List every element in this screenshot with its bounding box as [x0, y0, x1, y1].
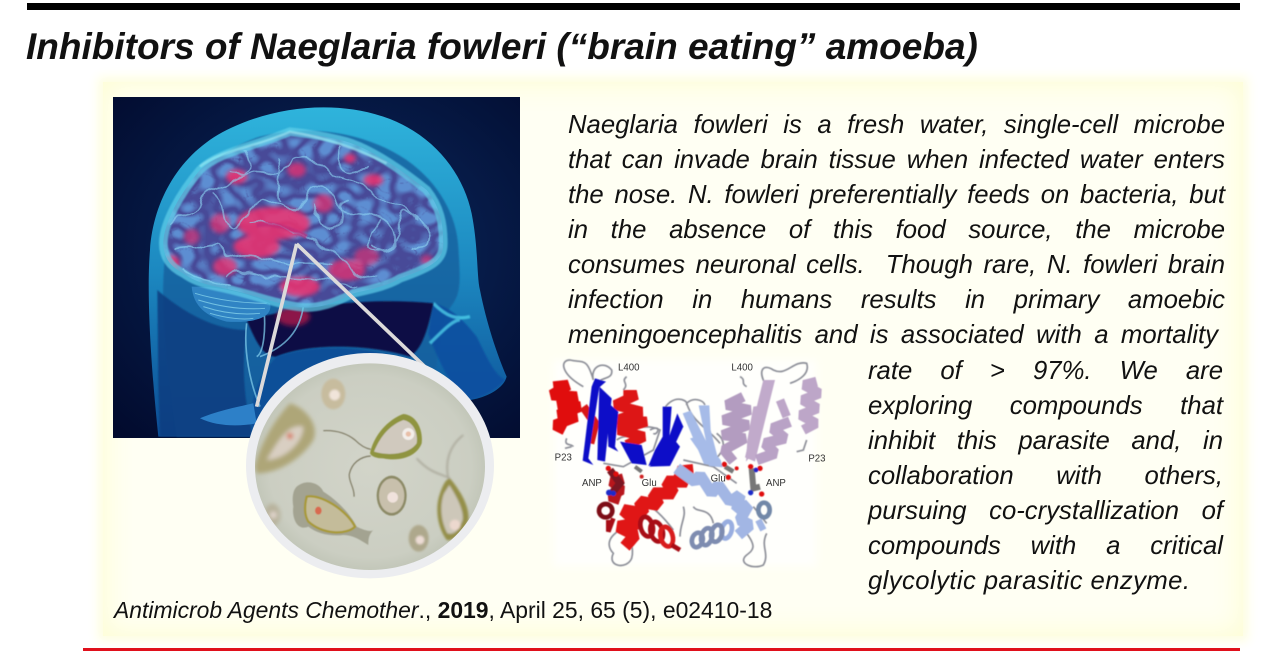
amoeba: central flagellated: [323, 414, 422, 497]
cerebellum: [192, 287, 270, 322]
amoeba: right blurred: [417, 435, 469, 540]
gyri texture: [164, 136, 443, 308]
text block: description lower: glycolytic parasitic enzyme.: [868, 567, 1190, 595]
text block: description lower: compounds with a critical: [868, 532, 1223, 560]
amoeba: bottom small: [409, 525, 429, 552]
protein labels: L400: [618, 362, 639, 373]
text block: description upper: [568, 111, 1226, 349]
icon: magnified amoeba circle: [246, 353, 494, 578]
head silhouette: [149, 107, 507, 437]
protein labels: P23: [808, 454, 826, 465]
protein labels: P23: [555, 452, 572, 463]
bottom red rule: [83, 648, 1240, 651]
text block: description upper: in the absence of this food source, the microbe: [568, 216, 1225, 244]
text block: description upper: meningoencephalitis and is associated with a mortality: [568, 321, 1218, 349]
brain hot spots: [164, 154, 433, 297]
text block: description lower: [867, 357, 1226, 595]
panel: pale yellow background: [103, 82, 1243, 636]
left alpha helices red: [552, 385, 580, 430]
protein labels: Glu: [711, 474, 726, 485]
protein labels: Glu: [642, 478, 657, 489]
text block: description lower: collaboration with others,: [868, 462, 1223, 490]
zoom callout lines: [257, 244, 430, 407]
text block: description upper: the nose. N. fowleri preferentially feeds on bacteria, but: [568, 181, 1225, 209]
protein labels: ANP: [582, 478, 602, 489]
amoeba: lower trophozoite: [293, 482, 373, 545]
loops: [564, 360, 807, 567]
text block: description upper: consumes neuronal cells. Though rare, N. fowleri brain: [568, 251, 1225, 279]
gyri folds: [170, 147, 428, 287]
ligands: [606, 462, 764, 497]
protein labels: L400: [731, 362, 753, 373]
text block: description lower: inhibit this parasite and, in: [868, 427, 1223, 455]
lower red helices: [618, 470, 693, 547]
diagram: protein ribbon structure: [548, 358, 826, 568]
illustration: head and brain: [113, 97, 796, 569]
brain mass: [153, 123, 453, 317]
text block: description lower: rate of > 97%. We are: [868, 357, 1223, 385]
text block: description lower: exploring compounds that: [868, 392, 1223, 420]
title: Inhibitors of Naeglaria fowleri (“brain eating” amoeba): [26, 26, 978, 67]
lower periwinkle helices: [677, 468, 750, 535]
top rule: [27, 3, 1240, 10]
text block: description upper: Naeglaria fowleri is a fresh water, single-cell microbe: [568, 111, 1225, 139]
citation: Antimicrob Agents Chemother., 2019, April 25, 65 (5), e02410-18: [114, 597, 772, 623]
left beta strands blue: [583, 378, 683, 467]
right lavender helices and strands: [801, 382, 819, 430]
protein labels: [555, 362, 826, 489]
protein labels: ANP: [766, 478, 786, 489]
amoeba: left blurred: [255, 403, 315, 473]
amoeba: small cyst: [377, 476, 407, 516]
text block: description upper: that can invade brain tissue when infected water enters: [568, 146, 1225, 174]
text block: description upper: infection in humans results in primary amoebic: [568, 286, 1225, 314]
text block: description lower: pursuing co-crystallization of: [868, 497, 1223, 525]
right beta strands periwinkle: [683, 405, 723, 467]
amoeba: top blurred: [321, 379, 345, 409]
